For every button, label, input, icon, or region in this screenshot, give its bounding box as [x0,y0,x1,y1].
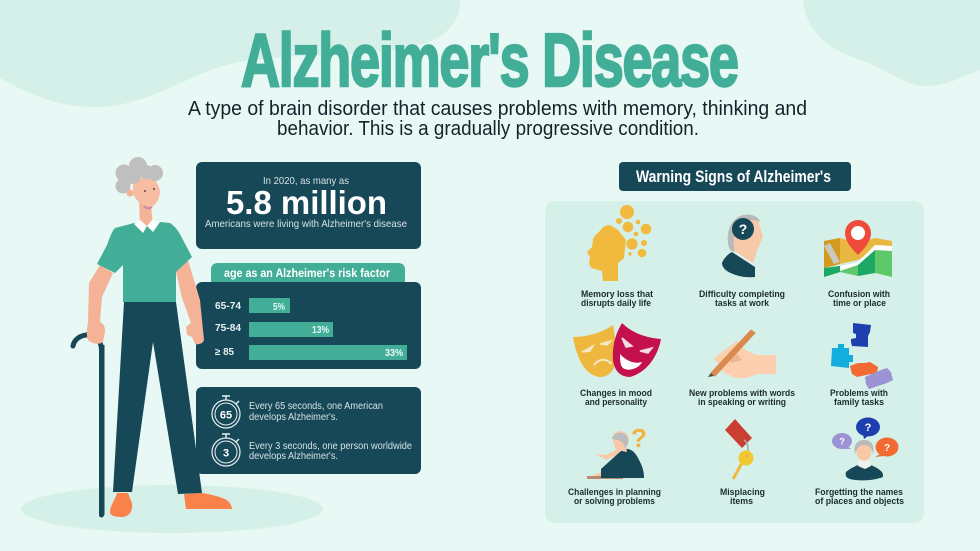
icon: person with question bubbles: ? [839,436,845,446]
sign: confusion with place: Confusion with [828,289,890,300]
sign: planning problems [568,423,661,507]
sign: forgetting names: of places and objects [815,496,904,507]
icon: stopwatch 65: 65 [220,410,232,422]
bar: 75-84 [215,322,333,337]
icon: hand writing with pencil [708,330,776,378]
sign: difficulty at work: tasks at work [715,298,770,309]
panel: 5.8 million statistic: In 2020, as many as [263,175,349,187]
text: every 65 seconds: Every 65 seconds, one American [249,401,383,412]
icon: stopwatch 3: 3 [223,448,229,460]
panel: 5.8 million statistic: 5.8 million [226,184,387,221]
sign: difficulty at work: Difficulty completing [699,289,785,300]
icon: person with question bubbles [832,418,898,480]
sign: confusion with place: time or place [833,298,886,309]
subtitle: behavior. This is a gradually progressive condition. [277,118,699,140]
icon: map with pin [824,220,892,277]
sign: word problems: New problems with words [689,388,795,399]
bar: 75-84: 13% [312,325,329,336]
bar: 85 and over [215,345,407,360]
icon: person at desk with question mark: ? [631,423,647,453]
panel: warning signs grid [545,201,924,523]
sign: difficulty at work [699,215,785,309]
subtitle [188,98,807,140]
sign: memory loss: Memory loss that [581,289,654,300]
icon: puzzle pieces [831,323,893,389]
icon: theatre masks [573,323,661,377]
text: every 3 seconds: Every 3 seconds, one person worldwide [249,441,412,452]
subtitle: A type of brain disorder that causes problems with memory, thinking and [188,98,807,120]
sign: planning problems: or solving problems [574,496,655,507]
bar: 65-74: 65-74 [215,301,241,312]
bar: 65-74 [215,298,290,313]
chart heading tab [211,263,405,285]
sign: misplacing items: items [730,496,753,507]
icon: person with question bubbles: ? [884,443,890,454]
sign: planning problems: Challenges in planning [568,487,661,498]
text: every 3 seconds: develops Alzheimer's. [249,451,338,462]
sign: forgetting names [815,418,904,507]
text: every 65 seconds [249,401,383,423]
icon: stopwatch 65 [212,396,240,428]
sign: forgetting names: Forgetting the names [815,487,903,498]
heading: warning signs [619,162,851,191]
panel: 5.8 million statistic [196,162,421,249]
panel: 5.8 million statistic: Americans were living with Alzheimer's disease [205,218,407,230]
icon: key with tag [725,419,754,479]
bar: 75-84: 75-84 [215,323,241,334]
sign: misplacing items [720,419,765,507]
sign: family tasks [830,323,893,408]
sign: memory loss [581,205,654,309]
sign: mood changes: and personality [585,397,648,408]
sign: misplacing items: Misplacing [720,487,765,498]
sign: confusion with place [824,220,892,309]
illustration: elderly man with cane [21,157,323,533]
sign: word problems [689,330,795,408]
sign: family tasks: family tasks [834,397,884,408]
title: Alzheimer's Disease [241,18,738,102]
panel: age risk factor chart [196,263,421,369]
sign: family tasks: Problems with [830,388,888,399]
heading: warning signs: Warning Signs of Alzheimer's [636,167,831,186]
icon: head with bubbles [587,205,651,281]
sign: memory loss: disrupts daily life [581,298,651,309]
text: every 65 seconds: develops Alzheimer's. [249,412,338,423]
icon: head with question mark: ? [739,221,747,237]
bar: 85 and over: 33% [385,348,403,359]
sign: mood changes [573,323,661,408]
bar: 65-74: 5% [273,302,285,313]
icon: stopwatch 3 [212,434,240,466]
panel: frequency facts [196,387,421,474]
icon: person with question bubbles: ? [865,422,872,434]
text: every 3 seconds [249,441,412,462]
sign: mood changes: Changes in mood [580,388,652,399]
sign: word problems: in speaking or writing [698,397,786,408]
bar: 85 and over: ≥ 85 [215,347,234,358]
chart heading tab: age as an Alzheimer's risk factor [224,268,390,280]
